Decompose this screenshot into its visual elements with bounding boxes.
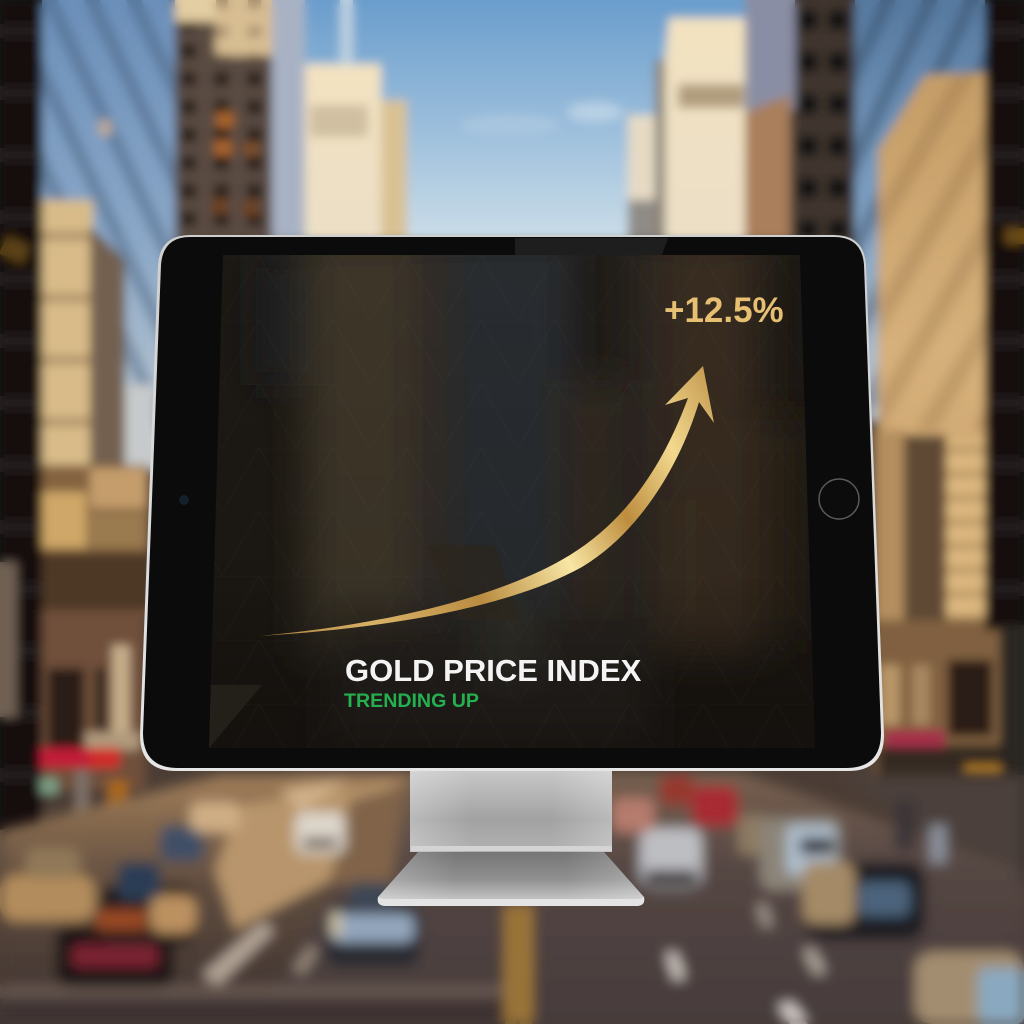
tablet [140,235,884,771]
screen reflected city [263,255,797,702]
stand base front lip [378,897,644,906]
right traffic [640,828,702,888]
street and traffic [0,772,1024,1024]
screen triangle grid [209,255,815,748]
white car [295,812,345,854]
bezel reflection [515,238,668,255]
camera [179,495,189,505]
chart subtitle: TRENDING UP [344,690,479,712]
brown window tower [175,0,272,240]
tablet stand [378,770,644,906]
stand neck [410,770,612,852]
left low-rise [30,465,148,615]
percent value: +12.5% [664,291,784,330]
right towers [628,115,656,200]
tablet bezel [143,237,881,768]
far-left dark tower [0,0,42,840]
stand base [378,852,644,906]
screen [209,235,815,750]
red car, lower left [56,925,174,987]
shop awnings and signals [40,748,120,768]
left glass tower [40,0,175,470]
tablet silver frame [140,235,884,771]
home button [819,479,859,519]
blue car [325,905,420,967]
chart title: GOLD PRICE INDEX [345,653,642,688]
stand hinge highlight [411,846,612,851]
cream tower [305,64,381,240]
gold trend arrow [260,366,714,636]
